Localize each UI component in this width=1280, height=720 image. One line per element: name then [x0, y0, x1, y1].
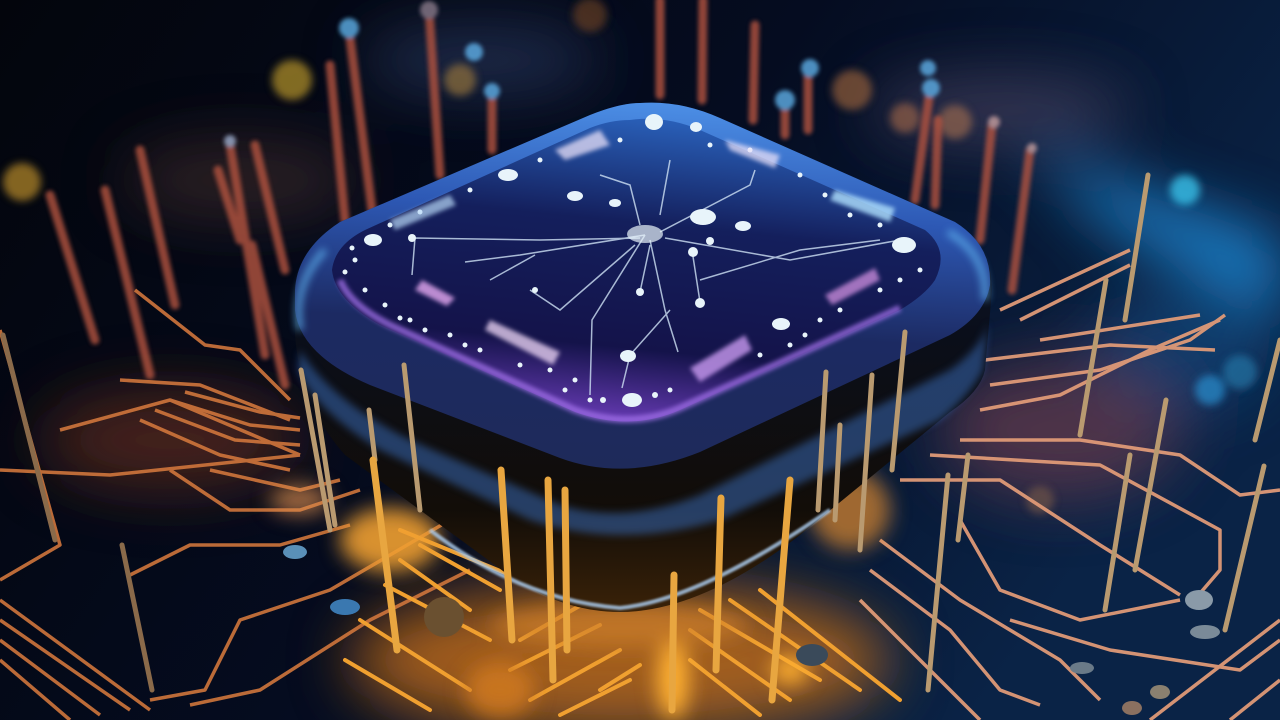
front pins: [3, 175, 1280, 710]
chip rim glow at base: [430, 510, 830, 608]
bokeh lights: [3, 0, 1257, 514]
rim glints: [298, 232, 985, 330]
chip package: [295, 103, 992, 612]
circuit traces left: [0, 290, 470, 720]
back pins: [50, 0, 1037, 385]
chip body: [295, 103, 992, 612]
chip glowing contact strips: [390, 130, 895, 382]
board components: [283, 545, 1220, 715]
purple edge glow: [340, 280, 900, 420]
circuit traces right: [860, 250, 1280, 720]
chip circuitry lines: [412, 160, 900, 395]
circuit traces bottom orange: [345, 530, 900, 715]
chip inner dark panel: [332, 119, 941, 422]
chip top face: [295, 103, 990, 469]
hot glow under chip: [270, 470, 890, 720]
chip side highlight band: [298, 320, 988, 535]
chip circuitry dots: [342, 114, 922, 407]
